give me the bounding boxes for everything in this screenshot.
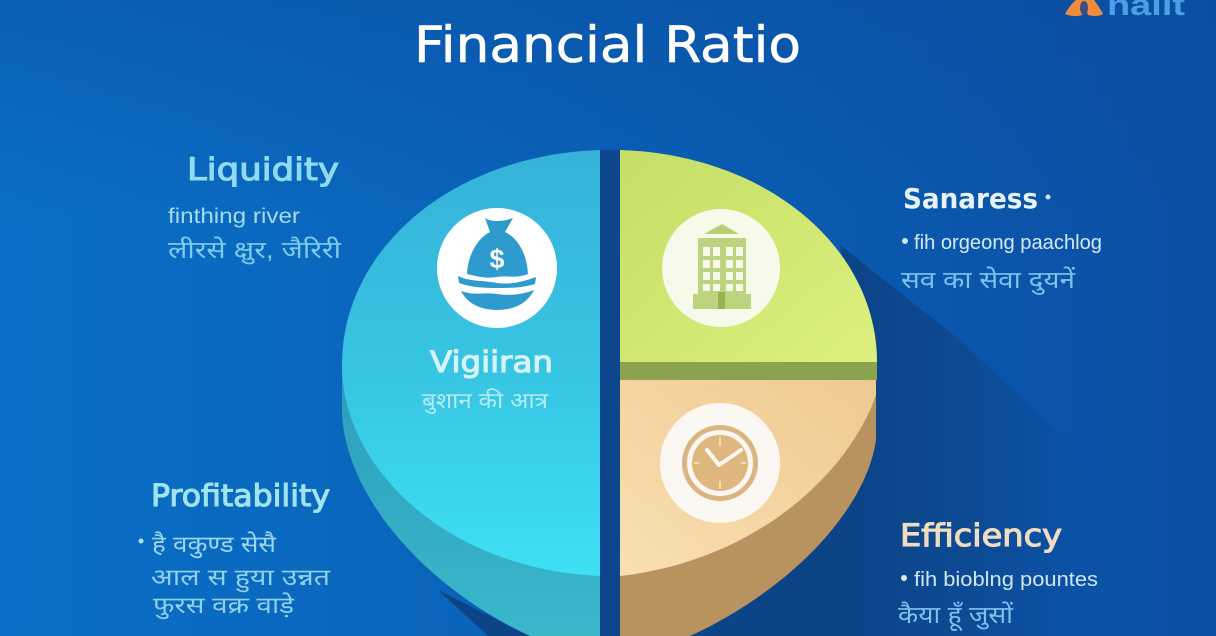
icon: money bag: $ [489, 244, 505, 274]
label: profitability: फुरस वक्र वाड़े [153, 592, 295, 620]
label: liquidity: Liquidity [187, 152, 339, 188]
label: vigiiran [422, 345, 553, 414]
label: sanaress: सव का सेवा दुयनें [901, 266, 1076, 295]
label: sanaress [901, 182, 1102, 295]
pie drop shadow: lower left [438, 590, 530, 636]
label: efficiency: fih bioblng pountes [914, 569, 1098, 591]
segment: liquidity cyan half [342, 150, 600, 576]
label: efficiency: Efficiency [900, 518, 1062, 554]
segment: brown extrusion [620, 380, 876, 636]
label: efficiency: कैया हूँ जुसों [898, 601, 1014, 632]
icon: money bag [437, 208, 557, 328]
pie drop shadow: right [690, 245, 1130, 636]
label: vigiiran: बुशान की आत्र [422, 388, 549, 414]
label: liquidity: finthing river [168, 205, 300, 228]
label: vigiiran: Vigiiran [430, 345, 553, 379]
icon: building [662, 209, 780, 327]
segment: left extrusion [342, 365, 600, 636]
icon: clock [660, 403, 780, 523]
label: profitability: Profitability [151, 479, 330, 514]
title: Financial Ratio [414, 16, 801, 74]
label: profitability [138, 479, 331, 620]
label: efficiency [898, 518, 1098, 632]
label: liquidity: लीरसे क्षुर, जैरिरी [168, 236, 342, 265]
label: sanaress: Sanaress [903, 182, 1038, 215]
label: sanaress: fih orgeong paachlog [914, 232, 1102, 254]
label: liquidity [168, 152, 342, 265]
label: profitability: आल स हुया उन्नत [151, 564, 331, 593]
center gap [600, 150, 620, 636]
green quadrant edge [620, 362, 877, 380]
segment: green quadrant [620, 150, 877, 362]
segment: peach quadrant [620, 380, 876, 576]
pie chart [342, 150, 877, 636]
logo [1065, 0, 1185, 22]
label: profitability: है वकुण्ड सेसै [152, 531, 276, 559]
